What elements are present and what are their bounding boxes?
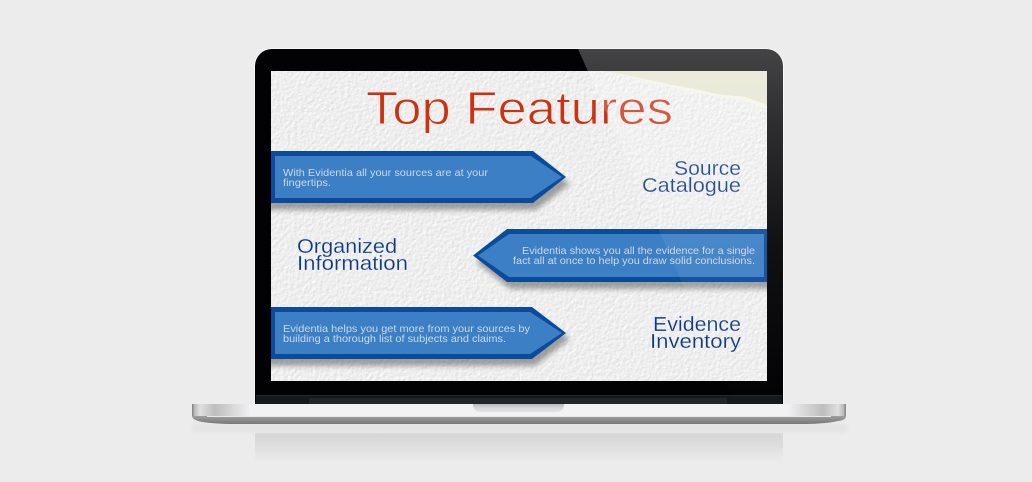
screen glare — [578, 49, 783, 314]
heading: source catalogue: Catalogue — [642, 175, 741, 197]
torn paper corner — [605, 71, 767, 109]
arrow: organized information: Evidentia shows you all the evidence for a single — [522, 245, 755, 257]
heading: organized information: Information — [297, 253, 408, 275]
arrow: organized information: fact all at once to help you draw solid conclusions. — [513, 255, 755, 267]
arrow: evidence inventory: Evidentia helps you get more from your sources by — [283, 323, 531, 335]
laptop reflection — [192, 424, 846, 463]
paper background — [271, 71, 767, 381]
laptop base — [192, 404, 846, 424]
laptop mockup infographic — [192, 48, 846, 452]
screen — [262, 71, 776, 381]
title: Top Features — [366, 82, 673, 134]
arrow: evidence inventory — [262, 307, 570, 366]
heading: evidence inventory — [650, 314, 741, 353]
heading: source catalogue: Source — [674, 158, 741, 180]
arrow: organized information — [473, 229, 776, 289]
arrow: source catalogue: fingertips. — [283, 177, 331, 189]
heading: organized information: Organized — [297, 236, 397, 258]
arrow: source catalogue: With Evidentia all your sources are at your — [283, 167, 489, 179]
arrow: source catalogue — [262, 151, 570, 210]
lid notch — [473, 404, 564, 412]
heading: evidence inventory: Evidence — [653, 314, 741, 336]
heading: organized information — [298, 238, 407, 270]
heading: evidence inventory: Inventory — [650, 331, 741, 353]
laptop lid — [254, 48, 784, 405]
arrow: evidence inventory: building a thorough list of subjects and claims. — [283, 333, 506, 345]
heading: source catalogue — [643, 161, 740, 196]
